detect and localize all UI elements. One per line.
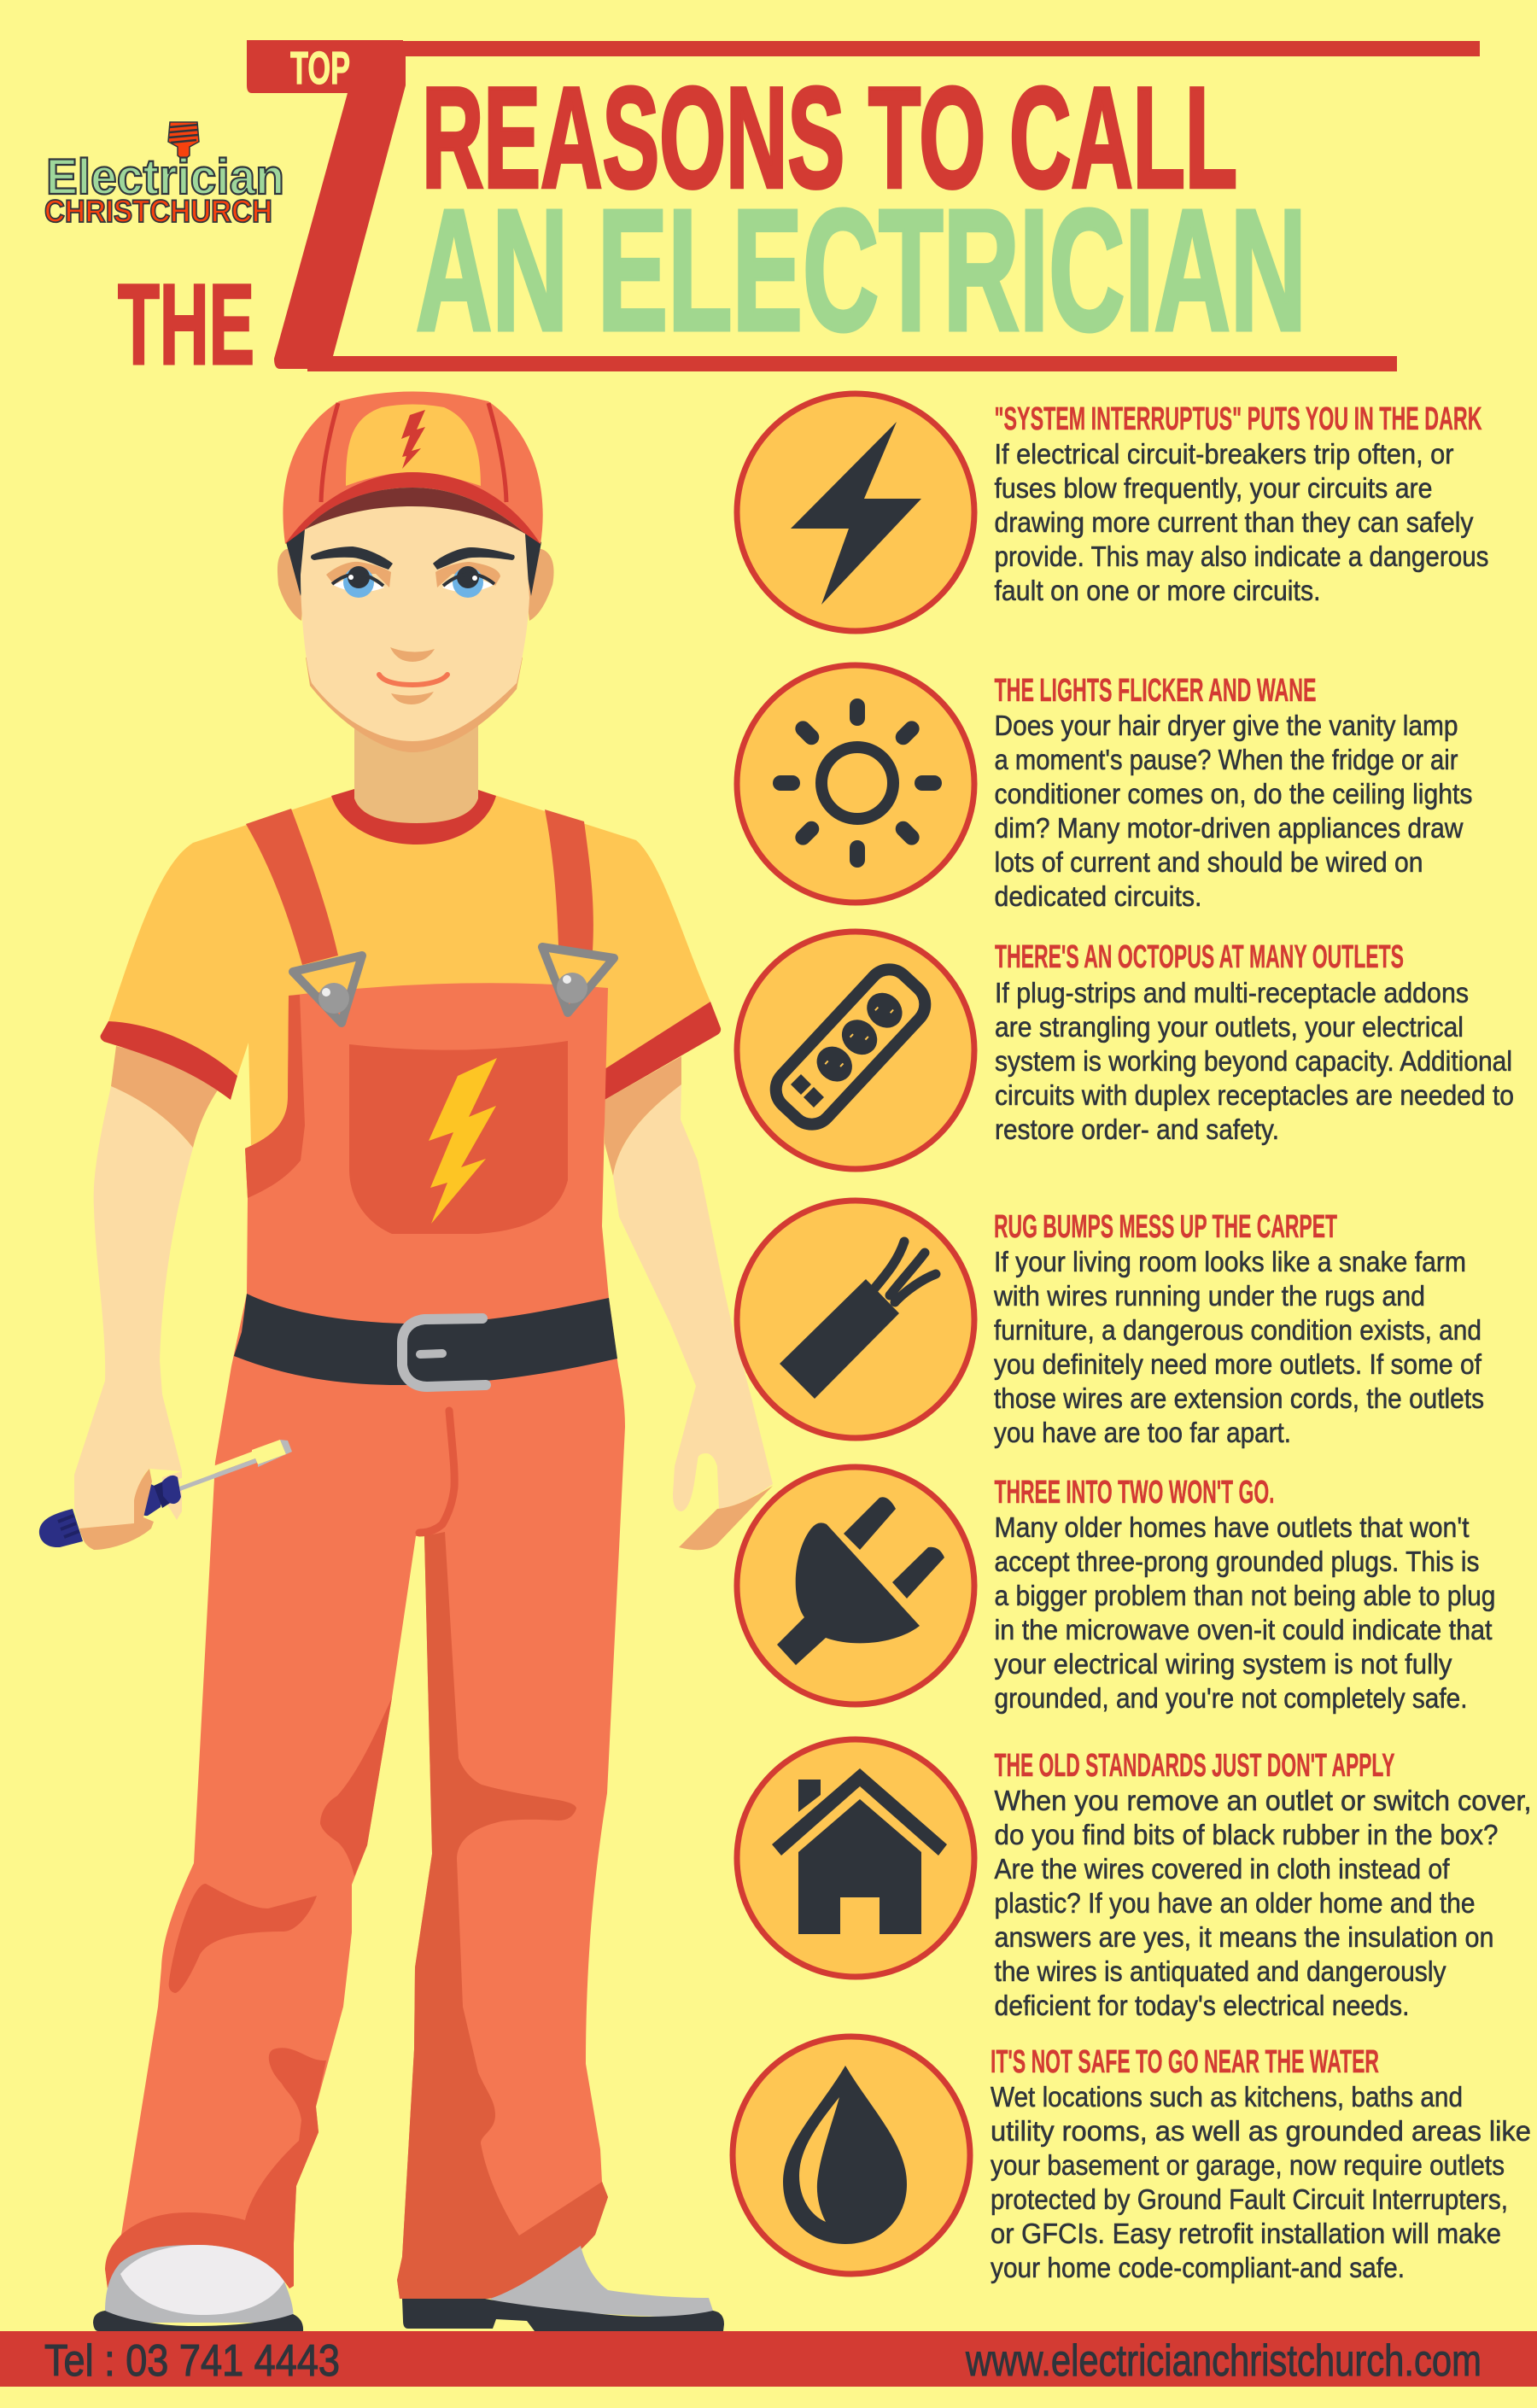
- logo city name: CHRISTCHURCH: [44, 194, 272, 229]
- body text: fuses blow frequently, your circuits are: [994, 472, 1433, 504]
- body text: are strangling your outlets, your electrical: [995, 1011, 1464, 1043]
- body text: your home code-compliant-and safe.: [991, 2252, 1405, 2283]
- cap brim: [285, 472, 541, 544]
- right arm and hand: [605, 1056, 773, 1550]
- left strap buckle: [293, 956, 362, 1023]
- body text: or GFCIs. Easy retrofit installation will make: [991, 2218, 1501, 2249]
- overalls and trousers: [105, 983, 625, 2299]
- body text: your electrical wiring system is not fully: [994, 1648, 1452, 1680]
- left hand shadow: [79, 1469, 154, 1550]
- icon: cap bolt: [401, 410, 425, 469]
- right eye: [442, 566, 494, 598]
- right sleeve cuff: [605, 1002, 721, 1100]
- left shin fold: [169, 1884, 317, 1993]
- body text: Wet locations such as kitchens, baths and: [991, 2081, 1463, 2113]
- icon: sun / flickering light: [737, 665, 974, 903]
- left knee fold: [320, 1698, 392, 1876]
- body text: accept three-prong grounded plugs. This is: [994, 1546, 1479, 1577]
- label: TOP: TOP: [290, 43, 350, 94]
- icon: water drop: [733, 2037, 970, 2274]
- icon: power strip: [737, 932, 974, 1169]
- body text: with wires running under the rugs and: [993, 1280, 1425, 1312]
- body text: Are the wires covered in cloth instead of: [994, 1853, 1450, 1885]
- neck: [354, 726, 478, 823]
- body text: utility rooms, as well as grounded areas like: [991, 2115, 1531, 2147]
- shirt: [108, 789, 710, 1145]
- footer bar: [0, 2331, 1537, 2387]
- icon: plug: [737, 1467, 974, 1704]
- panel: reason 3: [737, 932, 1514, 1169]
- body text: fault on one or more circuits.: [994, 575, 1320, 606]
- body text: [994, 710, 1472, 912]
- body text: you have are too far apart.: [994, 1417, 1291, 1448]
- body text: plastic? If you have an older home and the: [994, 1887, 1476, 1919]
- panel: reason 5: [737, 1467, 1496, 1714]
- label: THE: THE: [118, 261, 254, 389]
- body text: Does your hair dryer give the vanity lamp: [994, 710, 1458, 741]
- body text: If your living room looks like a snake farm: [994, 1246, 1466, 1277]
- mouth: [379, 675, 447, 685]
- logo: Electrician Christchurch: [44, 122, 284, 229]
- right shoe: [402, 2246, 724, 2331]
- left eye: [332, 566, 384, 598]
- trouser seam: [419, 1411, 454, 1533]
- heading: THREE INTO TWO WON'T GO.: [994, 1475, 1274, 1511]
- body text: conditioner comes on, do the ceiling lights: [994, 778, 1472, 809]
- logo wordmark: Electrician: [46, 149, 284, 205]
- body text: drawing more current than they can safely: [994, 506, 1474, 538]
- ears: [278, 546, 554, 621]
- body text: If plug-strips and multi-receptacle addons: [995, 977, 1469, 1008]
- body text: [995, 977, 1514, 1145]
- body text: a bigger problem than not being able to plug: [994, 1580, 1496, 1611]
- left shoe: [93, 2245, 303, 2331]
- icon: light bulb: [168, 122, 199, 161]
- body text: answers are yes, it means the insulation on: [994, 1921, 1494, 1953]
- phone number: Tel : 03 741 4443: [44, 2336, 340, 2386]
- panel: reason 7: [733, 2037, 1531, 2283]
- bib pocket: [349, 1041, 568, 1234]
- collar: [331, 789, 496, 845]
- body text: deficient for today's electrical needs.: [994, 1990, 1409, 2021]
- body text: furniture, a dangerous condition exists, and: [994, 1314, 1481, 1346]
- icon: lightning bolt: [737, 394, 974, 631]
- body text: [994, 1785, 1532, 2021]
- panel: reason 1: [737, 394, 1489, 631]
- left hem fold: [105, 2048, 326, 2288]
- right strap buckle: [542, 947, 614, 1013]
- belt: [234, 1294, 617, 1385]
- cap seams: [321, 403, 506, 502]
- screwdriver: [39, 1440, 292, 1547]
- icon: house: [737, 1739, 974, 1977]
- illustration: electrician figure: [39, 391, 773, 2331]
- cap: [283, 391, 543, 544]
- body text: lots of current and should be wired on: [994, 846, 1423, 878]
- body text: [991, 2081, 1531, 2283]
- icon: pocket lightning bolt: [429, 1058, 497, 1224]
- body text: [994, 438, 1489, 606]
- panel: reason 2: [737, 665, 1472, 912]
- body text: [993, 1246, 1484, 1448]
- header: title block: [118, 40, 1480, 389]
- panel: reason 6: [737, 1739, 1532, 2021]
- left strap: [246, 809, 338, 965]
- body text: in the microwave oven-it could indicate that: [994, 1614, 1493, 1645]
- brim underside: [305, 488, 525, 534]
- panel: reason 4: [737, 1201, 1484, 1448]
- eye shadows: [326, 562, 500, 587]
- left arm and hand: [74, 1046, 231, 1528]
- body text: those wires are extension cords, the outlets: [994, 1382, 1484, 1414]
- icon: cable with wires: [737, 1201, 974, 1438]
- bib side shading: [245, 995, 305, 1198]
- right strap: [545, 809, 593, 951]
- body text: the wires is antiquated and dangerously: [994, 1955, 1446, 1987]
- nose: [390, 647, 435, 662]
- body text: When you remove an outlet or switch cover,: [994, 1785, 1532, 1816]
- body text: restore order- and safety.: [995, 1113, 1279, 1145]
- eyebrows: [311, 546, 515, 570]
- body text: provide. This may also indicate a dangerous: [994, 541, 1489, 572]
- body text: dedicated circuits.: [994, 880, 1202, 912]
- body text: Many older homes have outlets that won't: [994, 1511, 1469, 1543]
- body text: If electrical circuit-breakers trip often, or: [994, 438, 1454, 470]
- body text: [994, 1511, 1496, 1714]
- hair: [286, 523, 541, 596]
- body text: a moment's pause? When the fridge or air: [994, 744, 1458, 775]
- cap badge: [346, 405, 481, 486]
- right leg shading: [397, 1532, 608, 2299]
- body text: do you find bits of black rubber in the box?: [994, 1819, 1498, 1850]
- face: [301, 506, 529, 752]
- body text: grounded, and you're not completely safe.: [994, 1682, 1467, 1714]
- heading: THE LIGHTS FLICKER AND WANE: [994, 673, 1317, 709]
- body text: you definitely need more outlets. If some of: [994, 1348, 1482, 1380]
- belt buckle: [402, 1318, 486, 1387]
- lower lip: [391, 692, 434, 704]
- body text: dim? Many motor-driven appliances draw: [994, 812, 1464, 844]
- left sleeve cuff: [101, 1021, 237, 1100]
- big numeral 7 frame: [247, 40, 1480, 371]
